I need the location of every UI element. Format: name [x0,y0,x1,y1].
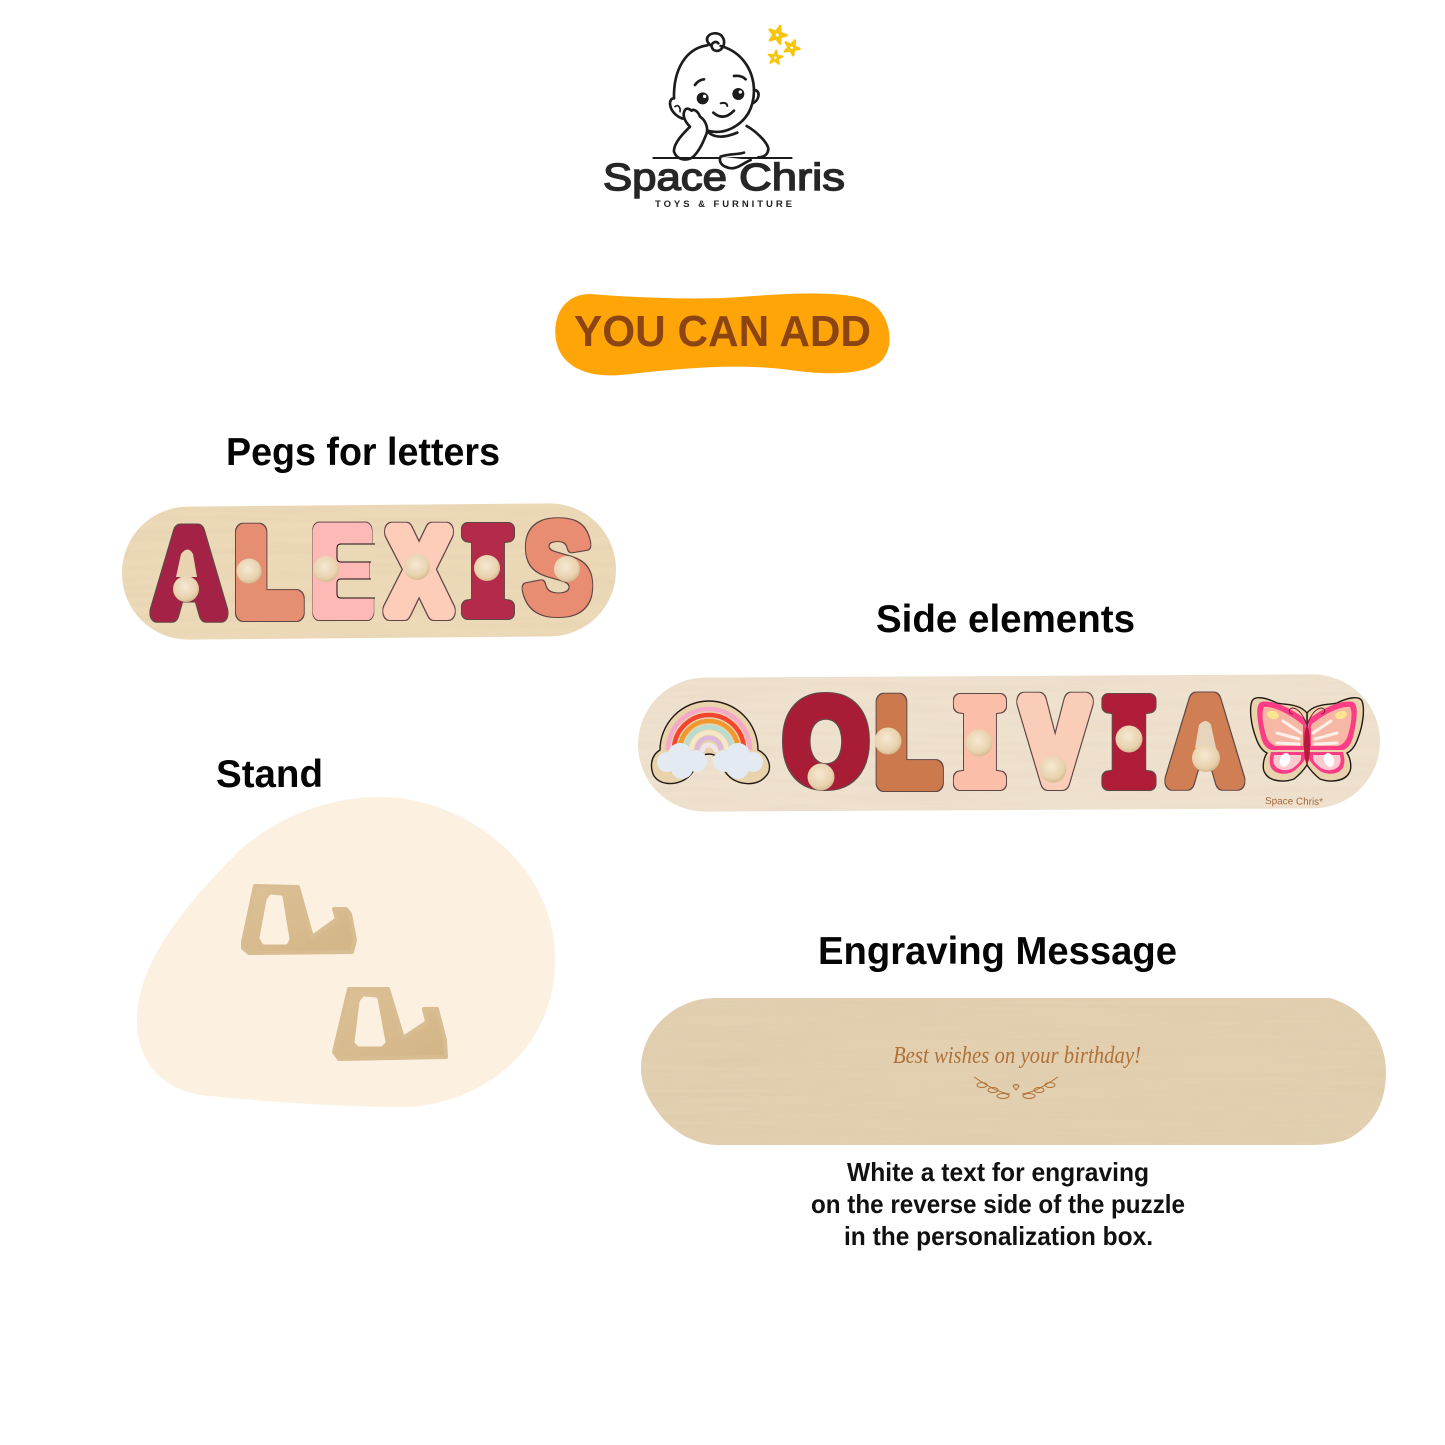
letters: ALEXIS: I [465,501,511,640]
puzzle board: OLIVIA [638,670,1380,815]
engraved board back [641,998,1386,1146]
heading: stand: Stand [216,753,323,796]
heading: side elements: Side elements [876,598,1135,641]
caption: engraving instructions: on the reverse side of the puzzle [811,1189,1185,1219]
letters: ALEXIS [155,499,592,640]
letters: OLIVIA: O [784,676,868,809]
engraved brand: Space Chris* [1265,796,1323,808]
side element: butterfly [1251,698,1363,781]
panel: stand blob [137,797,555,1107]
letter A counter [176,550,197,577]
puzzle board: ALEXIS [121,499,617,642]
wooden pegs [808,726,1220,790]
letters: OLIVIA: L [878,678,938,807]
logo tagline: TOYS & FURNITURE [655,199,792,210]
letters: OLIVIA: A [1171,678,1239,806]
letter A counter [1195,721,1216,748]
wooden stand 2 [334,989,446,1059]
logo wordmark [603,157,845,199]
logo wordmark: Chris [739,157,845,199]
wooden pegs [173,554,580,602]
letters: OLIVIA: I [957,672,1003,811]
letters: ALEXIS: A [155,510,223,638]
logo: Space Chris [603,24,845,210]
icon: yellow stars [767,24,802,64]
caption: engraving instructions [811,1157,1185,1251]
letters: ALEXIS: X [389,507,449,636]
badge: you can add: YOU CAN ADD [574,307,871,356]
letters: OLIVIA: I [1105,672,1153,810]
caption: engraving instructions: White a text for engraving [847,1157,1149,1187]
badge: you can add [555,293,890,375]
letter E notches [337,544,375,598]
caption: engraving instructions: in the personalization box. [844,1221,1153,1251]
letters: OLIVIA [784,672,1239,811]
heading: pegs for letters: Pegs for letters [226,431,500,474]
letters: ALEXIS: E [314,508,370,636]
engraved message: Best wishes on your birthday! [893,1043,1141,1069]
letters: ALEXIS: S [524,499,592,638]
letters: OLIVIA: V [1024,678,1086,806]
side element: rainbow [652,701,769,784]
letters: ALEXIS: L [237,508,299,636]
icon: baby leaning on hand [653,33,792,168]
engraved laurel [974,1077,1058,1098]
heading: engraving message: Engraving Message [818,930,1177,973]
logo wordmark: Space [603,157,727,199]
wooden stand 1 [243,886,355,953]
